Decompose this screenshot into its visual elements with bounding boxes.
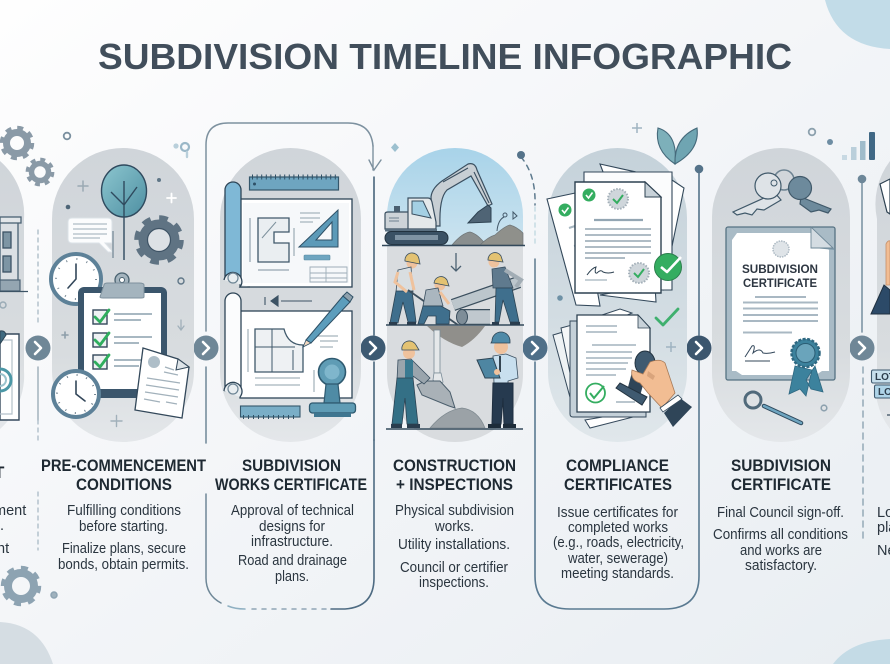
arrow node 1 — [26, 336, 50, 360]
icon: magnifier — [745, 392, 801, 423]
icon: upper blueprint — [224, 182, 352, 287]
capsule — [220, 148, 361, 442]
worker right — [488, 253, 521, 325]
title block — [310, 267, 347, 282]
green approval badge — [654, 254, 682, 280]
text block: subdivision works certificate: WORKS CERTIFICATE — [215, 475, 367, 494]
arrow node 5 — [686, 336, 712, 360]
text block: construction inspections: works. — [434, 519, 474, 535]
main certificate — [575, 182, 661, 293]
text block: pre-commencement conditions: PRE-COMMENCEMENT — [41, 456, 207, 475]
decorative corner circle bottom right — [833, 639, 890, 664]
timeline connectors and frames — [38, 123, 866, 609]
text block: subdivision works certificate: Road and drainage — [238, 553, 347, 569]
icon: building — [0, 217, 28, 308]
text block: compliance certificates: completed works — [568, 520, 668, 536]
decorative corner circle bottom left — [0, 622, 53, 664]
text block: subdivision works certificate: SUBDIVISION — [242, 456, 341, 475]
worker pouring concrete — [391, 341, 430, 428]
text block: pre-commencement conditions: CONDITIONS — [76, 475, 172, 494]
icon: bar chart — [842, 132, 875, 160]
text block: construction inspections — [393, 456, 516, 591]
icon: certificate document — [726, 227, 835, 396]
text block: subdivision certificate: Final Council sign-off. — [717, 505, 844, 521]
title: SUBDIVISION TIMELINE INFOGRAPHIC — [98, 36, 792, 77]
decorative marks — [557, 123, 676, 352]
icon: lower clock — [53, 371, 99, 417]
text block: subdivision certificate: and works are — [740, 543, 822, 559]
icon: stamp — [310, 358, 356, 417]
capsule left — [0, 161, 24, 429]
text block: construction inspections: Physical subdivision — [395, 503, 514, 519]
icon: hand with stamp — [616, 351, 692, 427]
icon: bottom ruler — [240, 406, 300, 417]
icon: green check mark — [656, 309, 678, 325]
icon: hand and suit — [871, 241, 890, 314]
icon: soil mounds — [452, 212, 523, 245]
text block: pre-commencement conditions: bonds, obtain permits. — [58, 557, 189, 573]
ground lines — [382, 246, 525, 429]
text block: construction inspections: + INSPECTIONS — [396, 475, 513, 494]
icon: tree — [102, 165, 146, 260]
panel: subdivision certificate illustration — [712, 129, 875, 442]
icon: down arrow — [451, 253, 461, 271]
icon: speech bubble — [68, 218, 113, 258]
text block: subdivision certificate — [713, 456, 848, 574]
icon: bottom left gear — [3, 568, 57, 604]
text block: construction inspections: Utility installations. — [398, 537, 510, 553]
icon: concrete pour — [417, 381, 485, 428]
text block: subdivision works certificate: designs for — [259, 519, 325, 535]
pencil — [303, 292, 353, 347]
text block: compliance certificates: COMPLIANCE — [566, 456, 669, 475]
text block: compliance certificates: water, sewerage) — [567, 551, 668, 567]
text block: pre-commencement conditions: Fulfilling conditions — [67, 503, 181, 519]
text block: partial step right — [877, 505, 890, 559]
capsule — [548, 148, 687, 442]
capsule sky and ground — [387, 148, 523, 442]
text block: pre-commencement conditions — [41, 456, 207, 573]
panel: compliance illustration — [547, 123, 697, 442]
icon: gear — [137, 218, 181, 262]
certificate heading: SUBDIVISION — [742, 264, 818, 276]
text block: subdivision certificate: CERTIFICATE — [731, 475, 831, 494]
text block: compliance certificates: (e.g., roads, electricity, — [553, 535, 684, 551]
icon: top ruler — [250, 177, 338, 190]
plan drawing — [248, 329, 338, 392]
icon: direction arrow — [265, 296, 312, 306]
text block: subdivision works certificate — [215, 456, 367, 585]
inspector with clipboard — [477, 332, 518, 428]
panel: pre-commencement illustration — [51, 133, 194, 442]
icon: trench and chute — [427, 326, 485, 385]
icon: stamped document stack — [553, 309, 650, 428]
text block: compliance certificates: Issue certificates for — [557, 505, 678, 521]
text block: subdivision certificate: satisfactory. — [745, 558, 817, 574]
icon: diamond marker — [391, 143, 399, 152]
decorative rings — [809, 129, 833, 411]
icon: keys — [733, 170, 831, 215]
rosette — [789, 339, 823, 396]
decorative corner circle top right — [825, 0, 890, 49]
lot labels — [872, 370, 890, 415]
certificate heading: CERTIFICATE — [743, 278, 817, 290]
text block: construction inspections: inspections. — [419, 575, 489, 591]
text block: partial step left — [0, 463, 26, 557]
text block: partial step left: . — [0, 518, 4, 534]
workers laying pipes — [389, 253, 521, 325]
floor plan drawing — [250, 213, 320, 270]
panel: construction illustration — [382, 143, 525, 442]
icon: development plan with seal — [0, 331, 19, 420]
certificate heading — [742, 264, 818, 290]
arrow node 6 — [850, 336, 874, 360]
arrow node 2 — [194, 336, 218, 360]
text block: subdivision certificate: Confirms all conditions — [713, 527, 848, 543]
icon: excavator — [385, 164, 492, 244]
icon: paper — [880, 179, 890, 214]
text block: subdivision works certificate: plans. — [275, 569, 309, 585]
worker left — [389, 253, 458, 325]
capsule — [712, 148, 850, 442]
set square — [299, 210, 338, 247]
arrow node 3 — [360, 336, 386, 360]
arrow node 4 — [522, 336, 548, 360]
decorative dots and plus marks — [62, 133, 189, 426]
text block: pre-commencement conditions: before starting. — [79, 519, 168, 535]
panel: partial step lot registration — [871, 161, 890, 429]
worker kneeling — [418, 277, 450, 324]
checklist rows — [93, 310, 152, 369]
capsule right — [875, 161, 890, 429]
icon: document — [135, 348, 189, 418]
text block: compliance certificates: meeting standards. — [561, 566, 674, 582]
icon: certificate stack — [547, 164, 684, 306]
icon: upper clock — [51, 254, 101, 304]
text block: compliance certificates — [553, 456, 684, 582]
panel: works certificate illustration — [220, 148, 361, 442]
icon: lower blueprint — [224, 292, 353, 398]
text block: subdivision certificate: SUBDIVISION — [731, 456, 831, 475]
text block: construction inspections: CONSTRUCTION — [393, 456, 516, 475]
icon: top left gears — [2, 128, 52, 184]
text block: subdivision works certificate: infrastructure. — [251, 534, 333, 550]
icon: leaves — [657, 128, 697, 164]
certificate seal — [773, 241, 789, 257]
text block: subdivision works certificate: Approval of technical — [231, 503, 354, 519]
text block: pre-commencement conditions: Finalize plans, secure — [62, 541, 186, 557]
icon: clipboard checklist — [78, 273, 167, 398]
signature — [745, 346, 775, 361]
text block: compliance certificates: CERTIFICATES — [564, 475, 672, 494]
panel: partial step site development — [0, 161, 28, 429]
capsule — [52, 148, 194, 442]
clipboard clip — [100, 273, 144, 298]
pipe — [453, 282, 519, 324]
text block: construction inspections: Council or certifier — [400, 560, 508, 576]
certificate lines — [743, 297, 818, 332]
